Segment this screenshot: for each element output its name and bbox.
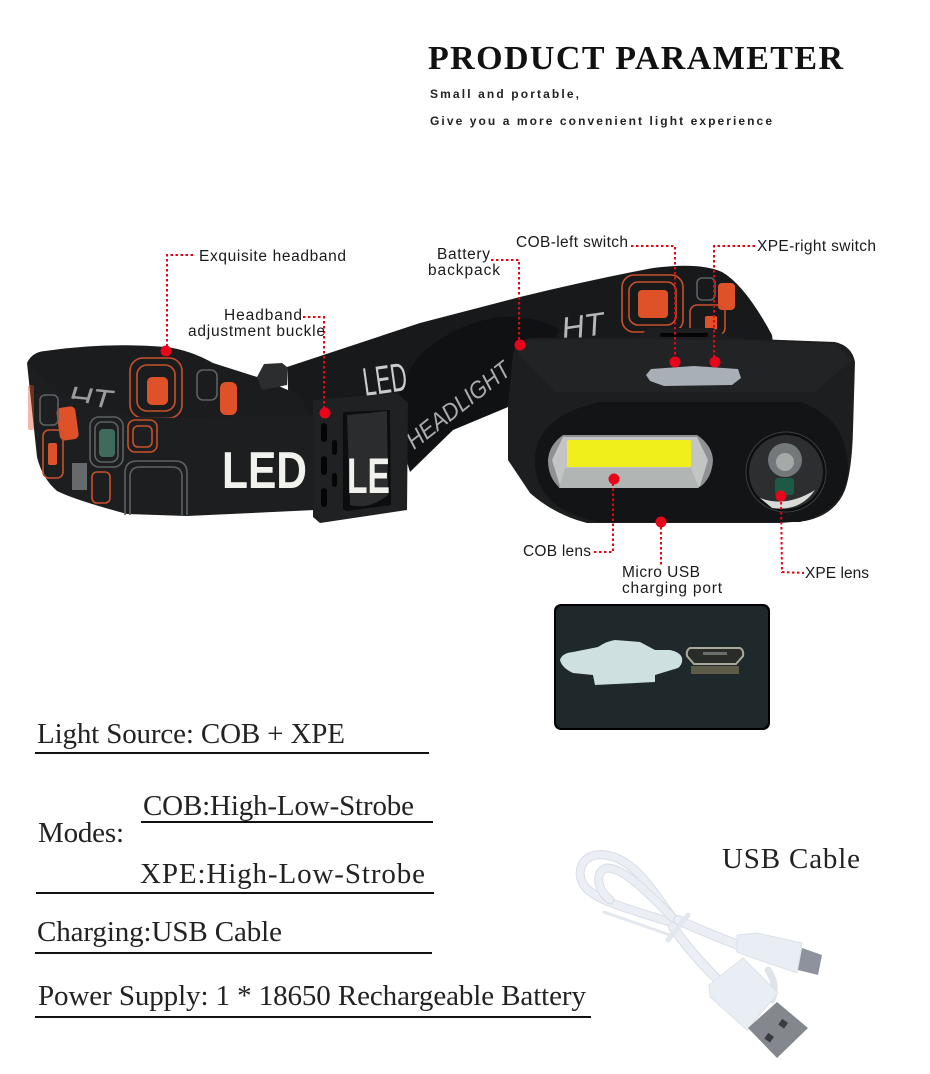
port cover [560, 640, 682, 685]
rear headband strap: HT [559, 305, 609, 347]
inset: micro USB port [554, 604, 770, 730]
callout labels: COB-left switch [516, 234, 628, 251]
adjustment buckle [313, 393, 408, 523]
inner loop of headband [27, 345, 314, 430]
USB cable heading: USB Cable [722, 843, 860, 875]
callout labels [188, 234, 876, 597]
spec: light source: Light Source: COB + XPE [37, 718, 345, 750]
subtitle: Give you a more convenient light experience [430, 114, 772, 128]
adjustment buckle: LE [347, 448, 390, 504]
callout labels: charging port [622, 580, 723, 597]
spec: power supply: Power Supply: 1 * 18650 Rechargeable Battery [38, 980, 586, 1012]
rear headband strap: HEADLIGHT [401, 355, 518, 455]
headlamp body [508, 328, 855, 523]
callout labels: XPE lens [805, 565, 869, 582]
title: PRODUCT PARAMETER [428, 40, 843, 77]
spec: modes [36, 790, 434, 893]
COB lens [548, 435, 713, 488]
micro USB socket [687, 648, 743, 674]
callout labels: adjustment buckle [188, 323, 325, 340]
specifications [35, 718, 591, 1017]
headlamp product photo [27, 266, 855, 523]
micro USB connector [737, 933, 822, 975]
inner loop of headband: HT [66, 379, 116, 420]
subtitle: Small and portable, [430, 87, 579, 101]
XPE lens [746, 432, 826, 512]
callout labels: Micro USB [622, 564, 700, 581]
front headband strap [27, 363, 315, 516]
callout labels: XPE-right switch [757, 238, 876, 255]
callout labels: Exquisite headband [199, 248, 346, 265]
spec: charging: Charging:USB Cable [37, 916, 282, 948]
callout labels: COB lens [523, 543, 591, 560]
rear headband strap: LED [360, 355, 410, 405]
callout labels: backpack [428, 262, 500, 279]
USB-A connector [709, 958, 808, 1058]
callout labels: Headband [224, 307, 302, 324]
spec: modes: Modes: [38, 817, 124, 849]
callout labels: Battery [437, 246, 490, 263]
rear headband strap [287, 266, 780, 472]
mode switches [646, 366, 741, 386]
spec: modes: XPE:High-Low-Strobe [140, 858, 425, 890]
front headband strap: LED [222, 442, 307, 500]
USB cable illustration [580, 855, 822, 1058]
callout leader lines [160, 246, 804, 573]
subtitle [430, 87, 772, 128]
spec: modes: COB:High-Low-Strobe [143, 790, 414, 822]
